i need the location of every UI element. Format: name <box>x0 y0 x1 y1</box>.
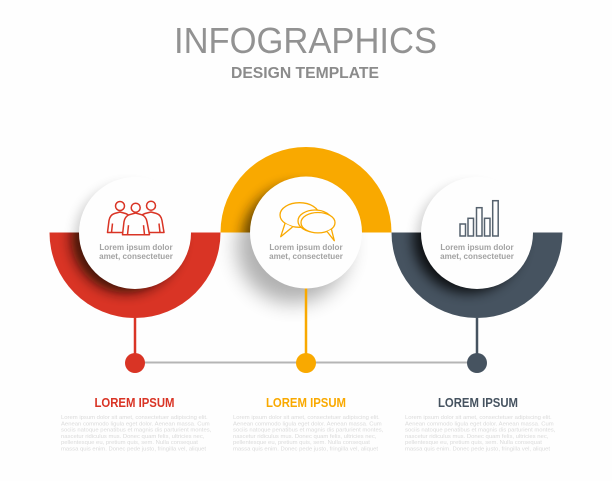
slate stem <box>476 318 478 360</box>
red stem <box>134 318 136 360</box>
column 1 body: massa quis enim. Donec pede justo, fringilla vel, aliquet <box>61 446 206 452</box>
white circle 1 <box>79 177 191 289</box>
circle 2 text: amet, consectetuer <box>269 252 344 261</box>
column 3 heading: LOREM IPSUM <box>438 396 518 410</box>
icon: speech bubbles <box>280 203 335 241</box>
column 2 body: Aenean commodo ligula eget dolor. Aenean massa. Cum <box>233 421 382 427</box>
step 2: yellow <box>220 147 392 373</box>
column 1 body: Aenean commodo ligula eget dolor. Aenean massa. Cum <box>61 421 210 427</box>
column 2 heading: LOREM IPSUM <box>266 396 346 410</box>
icon: bar chart <box>460 201 498 236</box>
column 2 body: pellentesque eu, pretium quis, sem. Nulla consequat <box>233 440 370 446</box>
column 1 body: Lorem ipsum dolor sit amet, consectetuer adipiscing elit. <box>61 415 208 421</box>
column 2 body: sociis natoque penatibus et magnis dis parturient montes, <box>233 428 384 434</box>
column 3 body: sociis natoque penatibus et magnis dis parturient montes, <box>405 428 556 434</box>
yellow stem <box>305 288 307 360</box>
column 1 body: nascetur ridiculus mus. Donec quam felis, ultricies nec, <box>61 434 205 440</box>
red dot <box>125 353 145 373</box>
yellow dot <box>296 353 316 373</box>
shadow of red circle <box>71 183 181 293</box>
red half ring <box>50 232 220 318</box>
white circle 2 <box>250 176 362 288</box>
shadow of slate circle <box>413 183 523 293</box>
circle 2 text: Lorem ipsum dolor <box>269 243 343 252</box>
circle 3 text: Lorem ipsum dolor <box>440 243 514 252</box>
column 3 body: Aenean commodo ligula eget dolor. Aenean massa. Cum <box>405 421 554 427</box>
circle 3 text: amet, consectetuer <box>440 252 515 261</box>
column 2 body: massa quis enim. Donec pede justo, fringilla vel, aliquet <box>233 446 378 452</box>
column 2 body: Lorem ipsum dolor sit amet, consectetuer adipiscing elit. <box>233 415 380 421</box>
slate half ring <box>392 232 562 318</box>
icon: people <box>108 201 164 235</box>
circle 1 text: amet, consectetuer <box>99 252 174 261</box>
step 3: slate <box>392 177 562 373</box>
column 1 heading: LOREM IPSUM <box>94 396 174 410</box>
column 2 body: nascetur ridiculus mus. Donec quam felis, ultricies nec, <box>233 434 377 440</box>
shadow of yellow circle <box>237 185 352 303</box>
column 1 body: pellentesque eu, pretium quis, sem. Nulla consequat <box>61 440 198 446</box>
circle 1 text: Lorem ipsum dolor <box>99 243 173 252</box>
column 3 body: pellentesque eu, pretium quis, sem. Nulla consequat <box>405 440 542 446</box>
subtitle: DESIGN TEMPLATE <box>231 65 379 82</box>
column 3 body: nascetur ridiculus mus. Donec quam felis, ultricies nec, <box>405 434 549 440</box>
white circle 3 <box>421 177 533 289</box>
title: INFOGRAPHICS <box>174 20 437 61</box>
column 3 body: massa quis enim. Donec pede justo, fringilla vel, aliquet <box>405 446 550 452</box>
step 1: red <box>50 177 220 373</box>
slate dot <box>467 353 487 373</box>
timeline connector <box>135 362 477 364</box>
yellow half ring <box>220 147 392 232</box>
column 3 body: Lorem ipsum dolor sit amet, consectetuer adipiscing elit. <box>405 415 552 421</box>
column 1 body: sociis natoque penatibus et magnis dis parturient montes, <box>61 428 212 434</box>
